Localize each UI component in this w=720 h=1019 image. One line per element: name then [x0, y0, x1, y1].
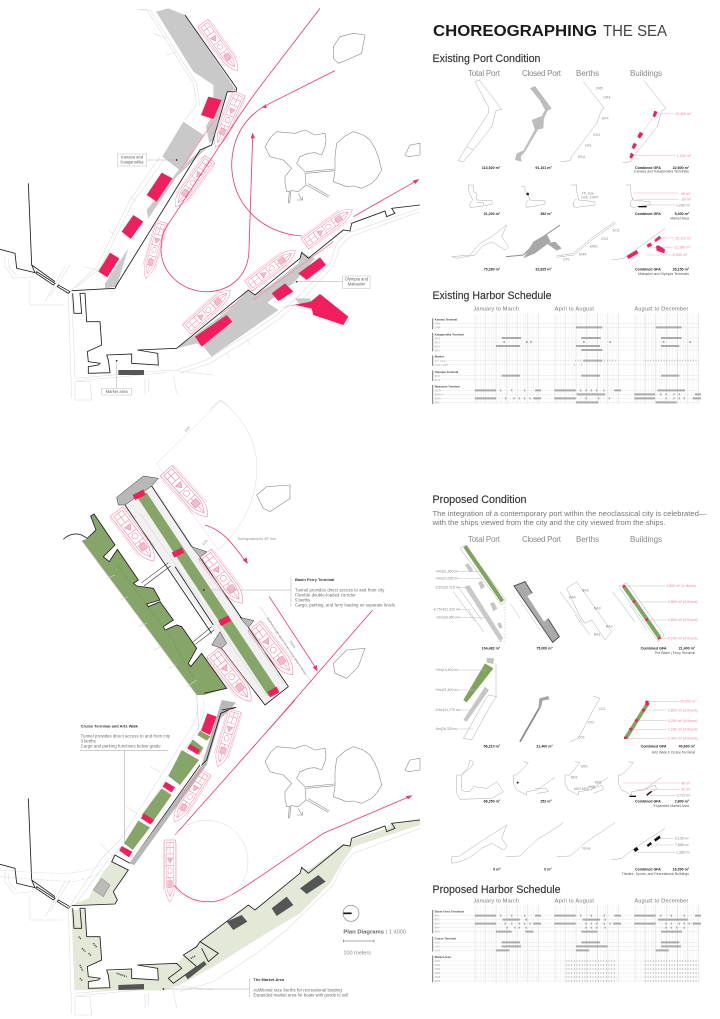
Kanava row: 91,101 m² [535, 166, 552, 170]
chart: existing harbor schedule: Kanava Terminal [435, 318, 457, 322]
chart: existing harbor schedule: EO1 [435, 374, 441, 378]
berth length dimension [260, 597, 373, 730]
basin row: 4,800 m² (6 floors) [668, 600, 698, 604]
closed port areas [105, 8, 315, 357]
cruise terminal roof [119, 713, 217, 857]
callout: The Market Area: The Market Area [253, 977, 285, 982]
label: Kanava: Makasiini [348, 281, 365, 286]
callout: Basin Ferry Terminal [203, 577, 395, 608]
recreational row: Theatre, Sports, and Recreational Buildings [622, 872, 689, 876]
panel: proposed diagrams lower [452, 760, 691, 876]
turning radius: 1/25 [184, 425, 191, 433]
cruise row: C02 [588, 720, 594, 724]
cruise row: C01 [599, 707, 605, 711]
quay edge [72, 765, 420, 988]
callout: Basin Ferry Terminal: Cargo, parking, and ferry loading on separate levels [295, 603, 395, 608]
Market row [468, 185, 692, 221]
title: CHOREOGRAPHING [433, 23, 597, 40]
panel: proposed condition heading: Closed Port [522, 535, 562, 544]
cruise row: +9m|14,400 m² [435, 668, 459, 672]
market row: 46 m² [681, 781, 691, 785]
Kanava row: 1,200 m² [677, 154, 692, 158]
Kanava row: 22,600 m² [673, 166, 690, 170]
market row: 2,800 m² [675, 799, 690, 803]
panel: existing condition heading: Berths [576, 69, 599, 78]
panel: proposed condition heading: The integration of a contemporary port within the neoclassical city is celebrated— [432, 509, 707, 518]
Kanava row [458, 80, 692, 174]
turning radius [157, 400, 365, 678]
berth length dimension: Berthing length allows for two cruise ships or ferries [266, 617, 308, 676]
label: Kanava: Olympia and [345, 276, 369, 281]
cruise row: 20,000 m² [680, 700, 697, 704]
heading: existing harbor schedule: Existing Harbor Schedule [432, 290, 552, 302]
chart: proposed harbor schedule: B02 [435, 918, 440, 922]
islands [265, 33, 420, 203]
callout: Basin Ferry Terminal: Basin Ferry Terminal [295, 577, 334, 582]
chart: proposed harbor schedule: M03 [435, 967, 441, 971]
panel: existing condition heading: Buildings [630, 69, 662, 78]
cruise row: 21,400 m² [536, 744, 553, 748]
callout: The Market Area: Expanded market area for boats with goods to sell [253, 993, 348, 998]
ships [109, 464, 300, 707]
basin row: -10m|26,460 m² [435, 615, 460, 619]
chart: existing harbor schedule: Katajanokka Terminal [435, 332, 464, 336]
Market row: 45 m² [681, 192, 691, 196]
chart: proposed harbor schedule: April to August [555, 898, 594, 904]
chart: proposed harbor schedule: B03 [435, 922, 440, 926]
recreational row [452, 823, 691, 876]
pier gray caps [117, 476, 254, 648]
Olympia row: Makasiini and Olympia Terminals [638, 272, 689, 276]
ships [140, 19, 357, 335]
Market row: Combined GFA [635, 212, 661, 216]
basin row: The Basin | Ferry Terminal [654, 651, 695, 655]
chart: existing harbor schedule: April to August [555, 307, 594, 313]
basin row [433, 545, 698, 655]
callout: Basin Ferry Terminal: 5 berths [295, 597, 310, 602]
basin row: BA4 [569, 596, 576, 600]
chart: existing harbor schedule [433, 307, 701, 405]
cruise row: 4,200 m² (6 floors) [668, 719, 698, 723]
label: Kanava [102, 154, 370, 395]
Olympia row [452, 222, 692, 276]
callout: Cruise Terminal: Cargo and parking functions below grade [81, 744, 161, 749]
cruise row: +9m|21,400 m² [435, 688, 459, 692]
market row: 66,250 m² [484, 799, 501, 803]
Market row: 36 m² [682, 198, 692, 202]
recreational row: Combined GFA [635, 867, 661, 871]
cruise row: C03 [578, 735, 584, 739]
callout: Cruise Terminal [80, 723, 171, 843]
recreational row: 7,888 m² [675, 843, 690, 847]
chart: existing harbor schedule: EO2 [435, 378, 441, 382]
buildings [98, 97, 348, 347]
panel: existing condition heading [432, 53, 662, 78]
panel: basin ferry terminal [63, 400, 395, 730]
berth length dimension: 280m [289, 640, 297, 649]
Kanava row: DR4 [603, 96, 610, 100]
turning radius: Turning radius for 90° turn [237, 537, 276, 541]
heading: proposed harbor schedule: Proposed Harbor Schedule [432, 884, 560, 896]
chart: proposed harbor schedule: B05 [435, 930, 440, 934]
chart: existing harbor schedule: EMA [435, 397, 441, 401]
panel: proposed condition heading [432, 494, 707, 544]
Olympia row: 75,280 m² [484, 268, 501, 272]
callout: Basin Ferry Terminal: Tunnel provides direct access to and from city [295, 587, 385, 592]
basin row: BA1 [594, 632, 601, 636]
chart: existing harbor schedule: DR4 [435, 326, 441, 330]
basin row: Combined GFA [641, 647, 667, 651]
basin row: 4,800 m² (4 floors) [666, 584, 696, 588]
chart: proposed harbor schedule [433, 898, 701, 983]
basin row: 4,200 m² (4 floors) [668, 637, 698, 641]
cruise row: Combined GFA [641, 744, 667, 748]
chart: existing harbor schedule: January to March [473, 307, 519, 313]
Kanava row: EKL [585, 143, 592, 147]
callout: Cruise Terminal: Cruise Terminal and Arts Walk [81, 723, 139, 728]
land lines [0, 9, 420, 409]
panel: existing condition heading: Closed Port [522, 69, 562, 78]
chart: existing harbor schedule: Makasiini Terminal [435, 385, 460, 389]
route paths [161, 8, 419, 292]
chart: existing harbor schedule: EK1 [435, 348, 440, 352]
Olympia row: EO1 [613, 228, 620, 232]
cruise row: 40,600 m² [679, 744, 696, 748]
pier outline [125, 486, 288, 705]
panel: proposed condition heading: Proposed Condition [432, 494, 526, 506]
Market row: 1,266 m² [676, 203, 691, 207]
Olympia row: 12,280 m² [674, 246, 691, 250]
Kanava row: EK4 [602, 117, 609, 121]
chart: proposed harbor schedule: January to March [473, 898, 519, 904]
small plaza [93, 878, 110, 897]
dark market buildings [118, 875, 326, 990]
basin row: BA2 [606, 625, 613, 629]
chart: proposed harbor schedule: B01 [435, 914, 440, 918]
Kanava row: Combined GFA [635, 166, 661, 170]
callout: Cruise Terminal: Tunnel provides direct access to and from city [81, 733, 171, 738]
recreational row: None [582, 847, 591, 851]
scale and legend: Plan Diagrams [343, 930, 384, 936]
chart: existing harbor schedule: EK4 [435, 336, 440, 340]
quay edge [72, 15, 420, 373]
basin row: 4,800 m² (6 floors) [668, 618, 698, 622]
Kanava row: 113,520 m² [482, 166, 501, 170]
chart: existing harbor schedule: EMS-A [435, 393, 444, 397]
panel: existing condition heading: Total Port [468, 69, 501, 78]
callout: Basin Ferry Terminal: Flexible double-loaded corridor [295, 592, 356, 597]
chart: proposed harbor schedule: C02 [435, 944, 440, 948]
chart: existing harbor schedule: Market [435, 355, 444, 359]
basin row: -6.75m|21,320 m² [433, 607, 461, 611]
scale and legend [343, 905, 406, 956]
Market row: 5,400 m² [675, 212, 690, 216]
title: THE SEA [603, 23, 668, 40]
chart: proposed harbor schedule: Market Area [435, 955, 451, 959]
panel: proposed diagrams upper [433, 545, 698, 754]
cruise row: -3.5m|31,775 m² [434, 708, 461, 712]
chart: existing harbor schedule: EK2 [435, 344, 440, 348]
cruise row: 2,400 m² (4 floors) [668, 736, 698, 740]
market kiosks [79, 937, 196, 981]
callout: The Market Area: Additional race berths for recreational boating [253, 988, 342, 993]
recreational row: 6,135 m² [675, 836, 690, 840]
Market row: 352 m² [540, 212, 552, 216]
label: Kanava: Katajanokka [121, 159, 144, 164]
chart: existing harbor schedule: HOL / HRT [435, 363, 449, 367]
Kanava row: 10,400 m² [675, 112, 692, 116]
callout: The Market Area [162, 977, 348, 998]
recreational row: 16,090 m² [673, 867, 690, 871]
cruise row: 2,800 m² (3 floors) [668, 708, 698, 712]
green park [82, 514, 227, 695]
basin row: +9m|21,300 m² [435, 570, 459, 574]
chart: proposed harbor schedule: Basin Ferry Terminals [435, 910, 465, 914]
land and harbour base [0, 798, 420, 1015]
panel: proposed condition heading: Buildings [630, 535, 662, 544]
Olympia row: 25,110 m² [675, 236, 692, 240]
islands [265, 745, 420, 818]
Olympia row: EO2 [601, 237, 608, 241]
Olympia row: 26,150 m² [673, 268, 690, 272]
panel: proposed condition heading: with the ships viewed from the city and the city viewed from the ships. [432, 518, 666, 527]
chart: proposed harbor schedule: B04 [435, 926, 440, 930]
Olympia row: EPL [563, 258, 570, 262]
chart: existing harbor schedule: August to December [634, 307, 688, 313]
panel: cruise terminal and market [68, 700, 413, 998]
recreational row: 0 m² [493, 867, 501, 871]
panel: proposed condition heading: Total Port [468, 535, 501, 544]
pink pavilions [133, 489, 279, 697]
basin row: 104,482 m² [482, 647, 501, 651]
panel: existing port diagrams [452, 80, 692, 276]
Olympia row: EMA [579, 252, 587, 256]
market row: 252 m² [540, 799, 552, 803]
market row: M06 [595, 780, 602, 784]
park edge [63, 514, 227, 693]
basin row: BA3 [594, 606, 601, 610]
panel: proposed plan [0, 745, 420, 1015]
Kanava row: DR5 [596, 86, 603, 90]
recreational row: 0 m² [544, 867, 552, 871]
chart: proposed harbor schedule: C01 [435, 940, 440, 944]
Kanava row: Kanava and Katajanokka Terminals [634, 170, 689, 174]
scale and legend: 100 meters [343, 950, 371, 956]
Market row: JTL-line [581, 191, 594, 195]
chart: proposed harbor schedule: M02 [435, 963, 441, 967]
Market row: Market Area [670, 217, 689, 221]
gray cruise quay [129, 700, 236, 865]
basin row: 75,000 m² [536, 647, 553, 651]
market row: M05 [588, 785, 595, 789]
market row: 2,710 m² [677, 793, 691, 797]
market row: 36 m² [681, 788, 691, 792]
title [433, 23, 668, 40]
connector bridges [142, 563, 214, 644]
cruise row: 7,200 m² (4 floors) [668, 727, 698, 731]
pink walkways [180, 122, 333, 315]
chart: existing harbor schedule: Olympia Terminal [435, 370, 458, 374]
chart: existing harbor schedule: EMS [435, 389, 441, 393]
basin row: 21,400 m² [679, 647, 696, 651]
market row: Combined GFA [635, 799, 661, 803]
market row: Expanded Market Area [654, 804, 689, 808]
Olympia row: 32,825 m² [535, 268, 552, 272]
Olympia row: 8,930 m² [673, 253, 688, 257]
Olympia row: EMS [590, 245, 598, 249]
chart: existing harbor schedule: EK3 [435, 340, 440, 344]
basin pier [125, 486, 288, 705]
cruise row [434, 658, 698, 754]
basin row: BA5 [582, 588, 589, 592]
label: Kanava: Market area [106, 389, 128, 394]
callout: Cruise Terminal: 3 berths [81, 738, 96, 743]
market row: M01 [581, 764, 588, 768]
panel: existing condition heading: Existing Port Condition [432, 53, 540, 65]
basin row: +9m|22,035 m² [435, 576, 459, 580]
pier green roof [137, 493, 277, 696]
scale and legend: | 1:4000 [386, 930, 406, 936]
market row [457, 760, 691, 808]
turning radius: 1/25 [201, 539, 209, 546]
chart: proposed harbor schedule: C03 [435, 948, 440, 952]
market row: M02 [571, 776, 578, 780]
route paths [165, 700, 413, 903]
chart: existing harbor schedule: JT - Line [435, 359, 446, 363]
chart: proposed harbor schedule: M01 [435, 959, 441, 963]
panel: existing port plan [0, 8, 420, 409]
recreational row: 1,365 m² [676, 850, 691, 854]
cruise row: -6m|26,325 m² [435, 727, 458, 731]
ships [163, 708, 242, 902]
panel: proposed condition heading: Berths [576, 535, 599, 544]
chart: proposed harbor schedule: M06 [435, 979, 441, 983]
basin row: -3.5m|26,715 m² [434, 585, 461, 589]
land strip [68, 700, 204, 908]
chart: existing harbor schedule: DR5 [435, 322, 441, 326]
Market row: HOL-1HRT [581, 195, 600, 199]
chart: proposed harbor schedule: M04 [435, 971, 441, 975]
cruise row: 56,210 m² [484, 744, 501, 748]
chart: proposed harbor schedule: Cruise Terminal [435, 936, 456, 940]
cruise row: Arts Walk & Cruise Terminal [652, 750, 695, 754]
chart: proposed harbor schedule: August to December [634, 898, 688, 904]
Kanava row: EKU [578, 155, 586, 159]
Market row: 21,200 m² [484, 212, 501, 216]
chart: proposed harbor schedule: M05 [435, 975, 441, 979]
Olympia row: Combined GFA [635, 268, 661, 272]
chart: existing harbor schedule: EPL [435, 401, 440, 405]
Kanava row: EK3 [593, 133, 600, 137]
label: Kanava: Kanava and [121, 155, 144, 160]
market row: M03 M04 [574, 787, 589, 791]
